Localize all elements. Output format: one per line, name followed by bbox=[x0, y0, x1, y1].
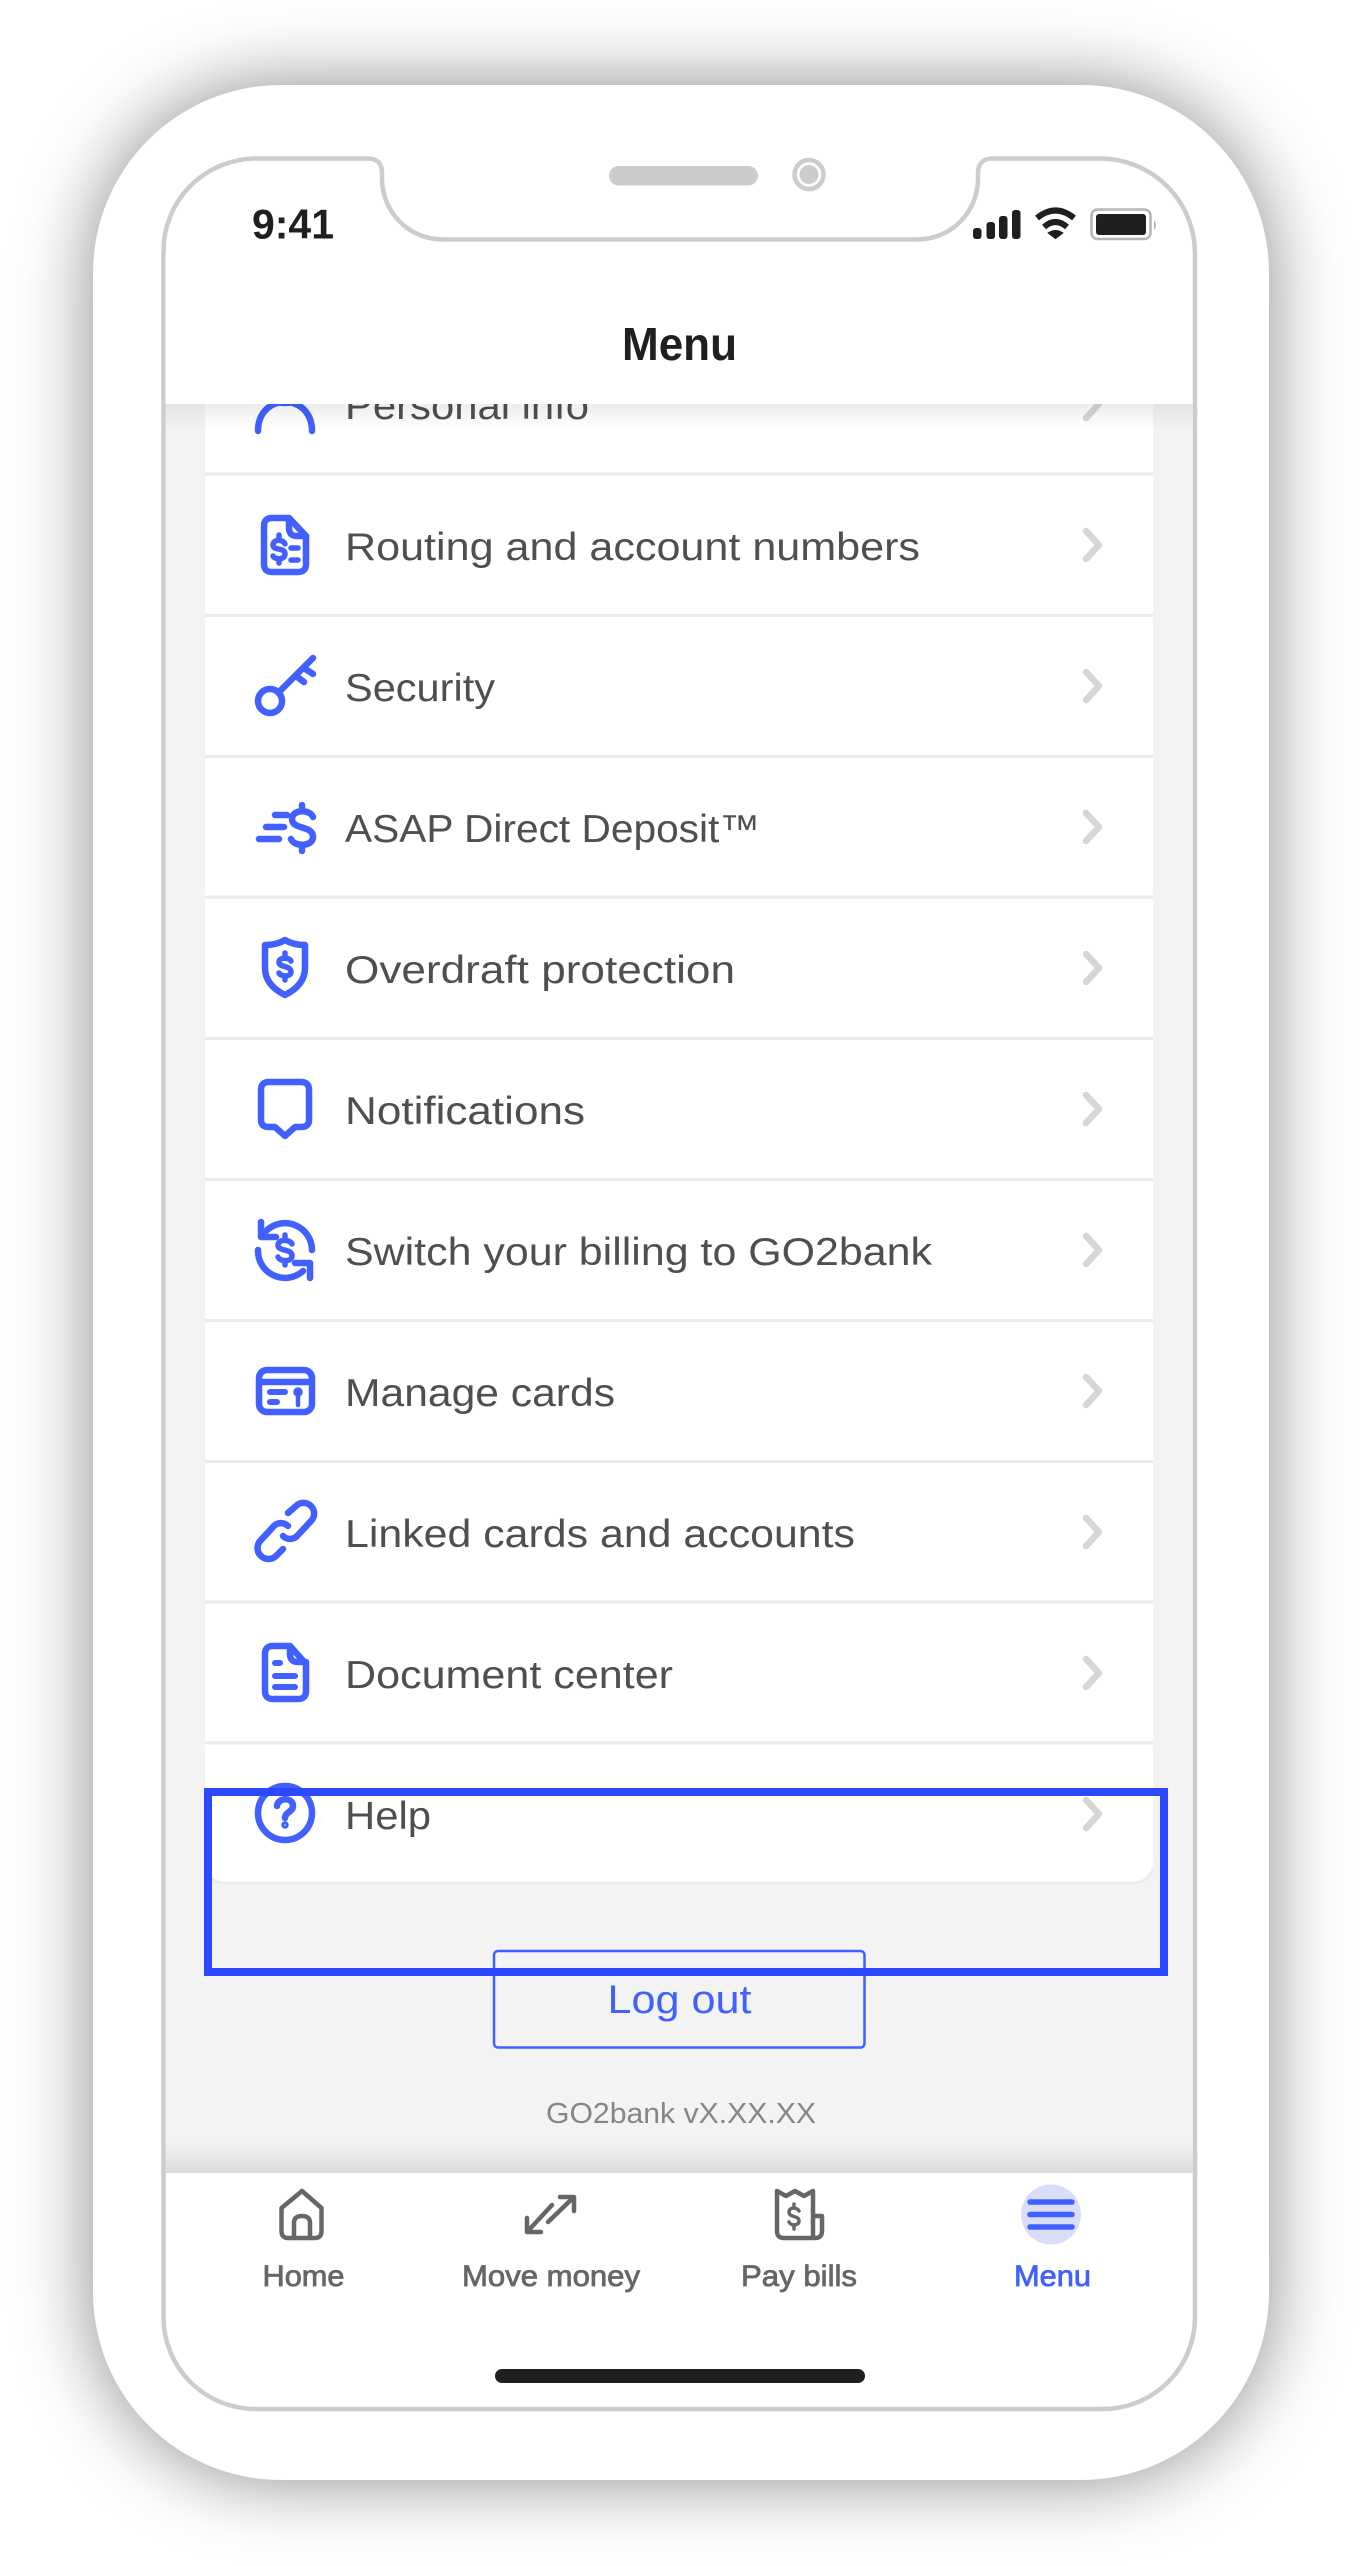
nav item: move money bbox=[462, 2197, 640, 2293]
label: personal info: Personal info bbox=[345, 385, 589, 428]
heading: menu: Menu bbox=[622, 318, 737, 370]
status bar time: 9:41 bbox=[252, 200, 334, 248]
chevron bbox=[1086, 1659, 1099, 1687]
icon: signal bars bbox=[973, 210, 1020, 239]
nav item: home bbox=[262, 2191, 344, 2293]
label: document center: Document center bbox=[345, 1654, 673, 1697]
icon: shield with dollar bbox=[265, 940, 305, 995]
icon: speech bubble bbox=[261, 1082, 309, 1136]
chevron bbox=[1086, 672, 1099, 700]
chevron bbox=[1086, 1095, 1099, 1123]
chevron bbox=[1086, 531, 1099, 559]
row: help bbox=[258, 1786, 1099, 1840]
row: document center bbox=[265, 1646, 1099, 1699]
chevron bbox=[1086, 954, 1099, 982]
row: overdraft protection bbox=[265, 940, 1099, 995]
icon: wifi bbox=[1037, 210, 1074, 238]
icon: document bbox=[265, 1646, 306, 1699]
icon: battery bbox=[1092, 210, 1156, 239]
chevron bbox=[1086, 1377, 1099, 1405]
chevron bbox=[1086, 813, 1099, 841]
icon: chain link bbox=[258, 1503, 314, 1559]
row: linked cards and accounts bbox=[258, 1503, 1099, 1559]
status bar icons bbox=[973, 210, 1156, 239]
nav item: pay bills bbox=[741, 2191, 857, 2293]
label: asap: ASAP Direct Deposit™ bbox=[345, 808, 760, 851]
icon: key bbox=[258, 658, 313, 713]
header shadow bbox=[166, 404, 1192, 430]
chevron bbox=[1086, 1518, 1099, 1546]
row dividers bbox=[205, 472, 1153, 1744]
label: manage cards: Manage cards bbox=[345, 1372, 615, 1415]
row: manage cards bbox=[259, 1370, 1099, 1415]
chevron bbox=[1086, 390, 1099, 418]
label: pay bills: Pay bills bbox=[741, 2260, 857, 2293]
chevron bbox=[1086, 1800, 1099, 1828]
row: switch your billing bbox=[258, 1222, 1099, 1278]
version text: GO2bank vX.XX.XX bbox=[546, 2098, 816, 2130]
notch camera bbox=[794, 160, 824, 189]
bottom navigation bbox=[262, 2184, 1091, 2293]
row: personal info bbox=[258, 365, 1099, 431]
highlight rectangle callout bbox=[208, 1792, 1164, 1972]
bottom nav shadow bbox=[166, 2141, 1192, 2173]
label: move money: Move money bbox=[462, 2260, 640, 2293]
icon: receipt bbox=[777, 2191, 822, 2238]
icon: card bbox=[259, 1370, 312, 1412]
phone screen outline with notch bbox=[164, 158, 1195, 2409]
row: notifications bbox=[261, 1082, 1099, 1136]
icon: hamburger in circle bbox=[1021, 2184, 1081, 2244]
label: security: Security bbox=[345, 667, 496, 710]
icon: question mark bbox=[258, 1786, 312, 1840]
icon: person bbox=[258, 365, 312, 431]
panel: menu list card bbox=[205, 365, 1153, 1883]
label: overdraft: Overdraft protection bbox=[345, 949, 735, 992]
label: switch: Switch your billing to GO2bank bbox=[345, 1231, 933, 1274]
scroll area background bbox=[166, 404, 1192, 2173]
label: notifications: Notifications bbox=[345, 1090, 585, 1133]
icon: dollar with circular arrows bbox=[258, 1222, 312, 1278]
header bar bbox=[166, 253, 1192, 404]
icon: home bbox=[282, 2191, 322, 2238]
home indicator bbox=[495, 2369, 865, 2383]
label: routing: Routing and account numbers bbox=[345, 526, 920, 569]
row: routing and account numbers bbox=[264, 518, 1099, 572]
log out button: Log out bbox=[608, 1978, 752, 2022]
icon: arrows bbox=[527, 2197, 574, 2232]
icon: fast dollar bbox=[259, 805, 313, 851]
icon: document with dollar bbox=[264, 518, 306, 572]
chevron bbox=[1086, 1236, 1099, 1264]
label: home: Home bbox=[262, 2260, 344, 2293]
nav item: menu active bbox=[1014, 2184, 1091, 2293]
row: asap direct deposit bbox=[259, 805, 1099, 851]
label: linked cards: Linked cards and accounts bbox=[345, 1513, 855, 1556]
label: menu: Menu bbox=[1014, 2260, 1091, 2293]
row: security bbox=[258, 658, 1099, 713]
notch speaker bbox=[609, 166, 758, 186]
log out button bbox=[494, 1951, 864, 2048]
label: help: Help bbox=[345, 1795, 431, 1838]
